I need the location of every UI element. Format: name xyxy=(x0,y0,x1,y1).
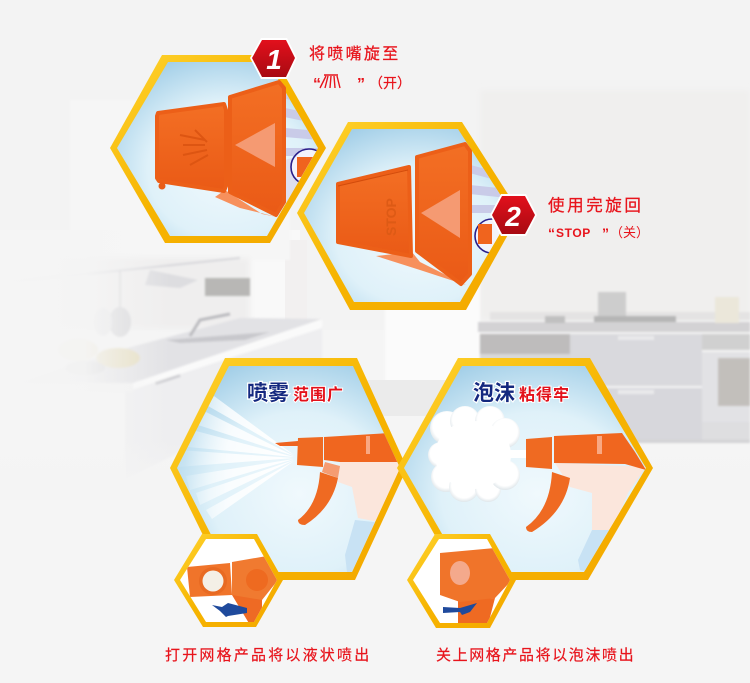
caption: step 1: ” xyxy=(357,76,365,93)
panel: foam hexagon xyxy=(397,358,653,580)
caption: stop label: “ xyxy=(548,225,555,241)
badge: number 1: 1 xyxy=(266,44,282,75)
panel: spray hexagon xyxy=(170,358,407,580)
heading: spray: 范围广 xyxy=(293,386,344,404)
heading: spray xyxy=(247,382,344,405)
spray rays xyxy=(178,396,294,519)
panel: closed mesh inset xyxy=(407,534,516,628)
heading: spray: 喷雾 xyxy=(247,382,289,405)
foam cloud xyxy=(428,406,528,502)
caption: stop label: STOP xyxy=(556,226,591,240)
badge: number 2: 2 xyxy=(504,201,521,232)
caption: stop label: ” xyxy=(602,225,609,241)
stripes behind nozzle xyxy=(286,93,318,156)
caption: closed mesh: 关上网格产品将以泡沫喷出 xyxy=(436,647,635,664)
caption: step 1: 将喷嘴旋至 xyxy=(309,45,401,63)
nozzle stop piece xyxy=(338,144,470,285)
arrow: turn direction xyxy=(443,603,477,615)
badge: number 1 xyxy=(250,38,297,79)
nozzle stop piece: STOP xyxy=(383,198,399,236)
left counter xyxy=(0,258,322,480)
caption: stop label xyxy=(548,225,649,241)
caption: step 1: （开） xyxy=(369,75,411,91)
spray bottle xyxy=(275,433,402,572)
caption: stop label: （关） xyxy=(610,225,649,240)
caption: step 2: 使用完旋回 xyxy=(548,196,644,215)
badge: number 2 xyxy=(490,194,537,236)
right counter xyxy=(478,292,750,443)
panel: step 2 hexagon xyxy=(297,122,520,310)
foam bottle xyxy=(526,433,646,572)
caption: step 1: “ xyxy=(313,76,321,93)
caption: open mesh: 打开网格产品将以液状喷出 xyxy=(165,647,371,664)
heading: foam: 粘得牢 xyxy=(519,386,570,404)
panel: open mesh inset xyxy=(174,534,283,627)
panel: step 1 hexagon xyxy=(110,55,327,243)
nozzle open piece xyxy=(157,82,284,217)
heading: foam xyxy=(473,382,570,405)
arrow: turn direction xyxy=(212,603,247,617)
icon: spray symbol xyxy=(320,75,340,88)
heading: foam: 泡沫 xyxy=(473,382,515,405)
caption: step 1 xyxy=(309,45,411,93)
